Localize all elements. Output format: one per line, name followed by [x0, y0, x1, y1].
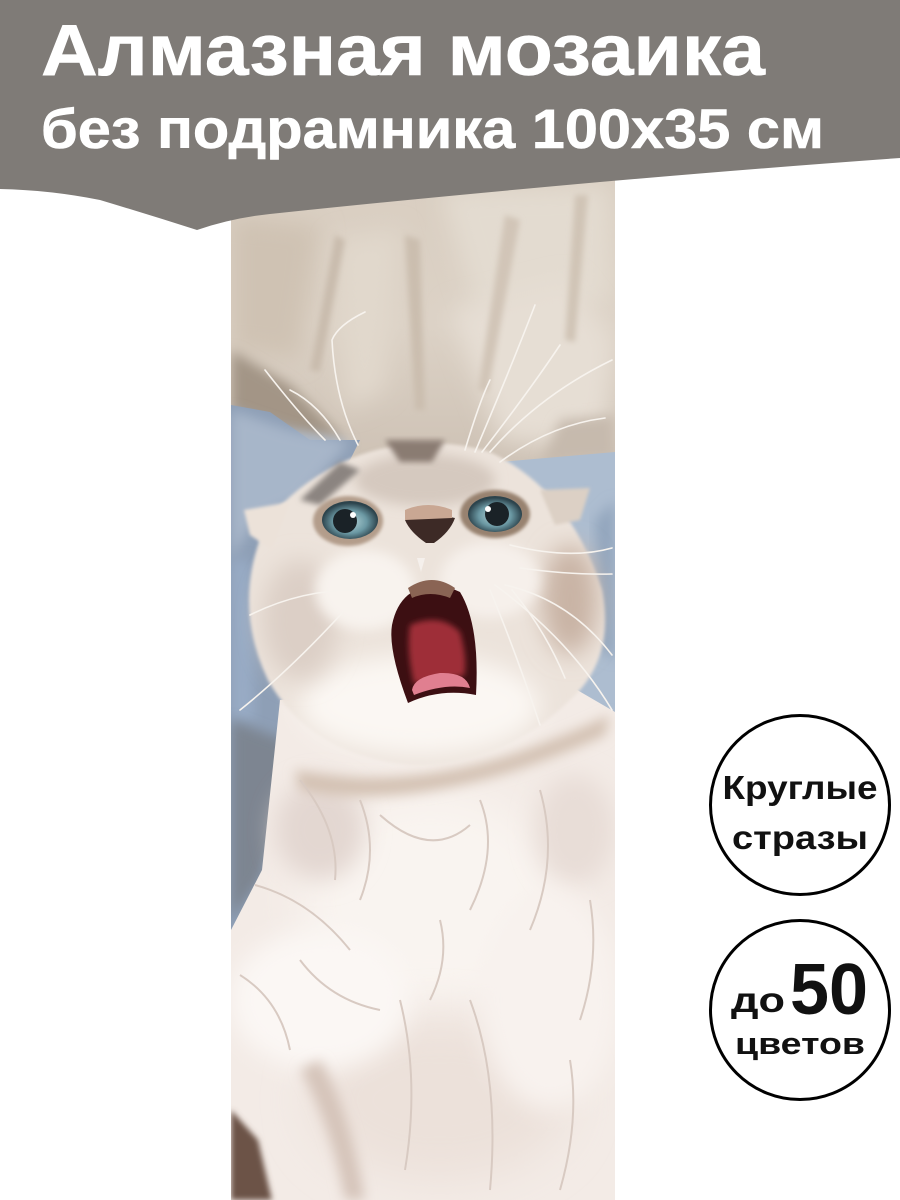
cat body: [230, 680, 620, 1200]
mouth: [391, 586, 477, 703]
badge: up to 50 colours: до: [731, 981, 785, 1020]
badge: round rhinestones: стразы: [732, 819, 868, 856]
title line 2: без подрамника 100х35 см: [41, 97, 824, 160]
nose: [405, 515, 455, 543]
ears: [242, 502, 286, 542]
blue pillows: [231, 405, 615, 930]
cat photo: [230, 180, 620, 1200]
eye left: [313, 496, 383, 546]
title: [41, 11, 824, 160]
badge: up to 50 colours: 50: [790, 950, 868, 1030]
beige curtain background: [231, 180, 615, 470]
badge: up to 50 colours: цветов: [735, 1026, 865, 1061]
whiskers: [240, 305, 612, 725]
eye right: [460, 490, 530, 538]
cat head: [244, 440, 605, 765]
muzzle: [315, 550, 415, 630]
header banner: [0, 0, 900, 230]
badge: round rhinestones: Круглые: [722, 769, 878, 806]
badge: round rhinestones: [710, 716, 890, 894]
badge: up to 50 colours: [710, 920, 890, 1100]
fur strands: [240, 780, 593, 1190]
title line 1: Алмазная мозаика: [41, 11, 766, 91]
